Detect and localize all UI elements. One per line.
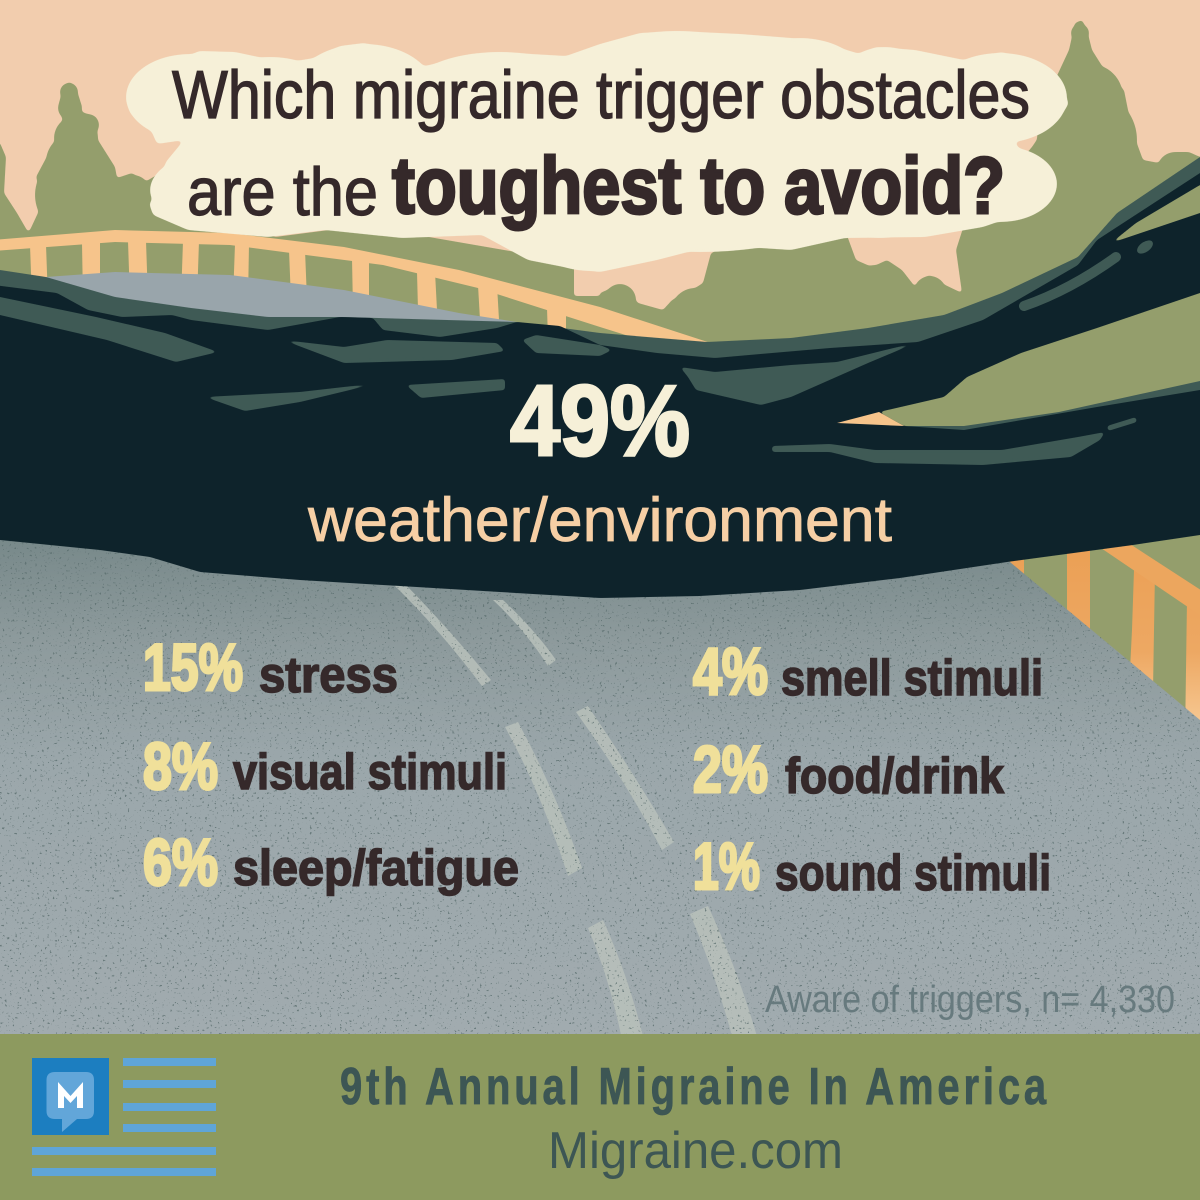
stat: sleep/fatigue: [143, 825, 519, 899]
band main body: [0, 150, 1200, 598]
bridge rail, far side: [0, 230, 720, 352]
stat: visual stimuli: visual stimuli: [233, 744, 507, 800]
stat: stress: [143, 630, 398, 704]
stat: stress: stress: [259, 647, 398, 703]
stat: visual stimuli: 8%: [143, 729, 218, 803]
bridge rail and posts, near side: [1007, 530, 1200, 740]
49 percent: 49%: [510, 365, 690, 477]
stat: sound stimuli: 1%: [693, 829, 760, 903]
stat: sleep/fatigue: 6%: [143, 825, 218, 899]
road grain: [0, 540, 1200, 1034]
stat: sleep/fatigue: sleep/fatigue: [233, 840, 519, 896]
right stat list: [693, 634, 1051, 903]
title cloud: [126, 31, 1069, 272]
left stat list: [143, 630, 519, 899]
stat: food/drink: food/drink: [785, 748, 1004, 804]
headline statistic: [307, 365, 892, 555]
orange bridge glimpse: [837, 412, 904, 426]
title line 1: Which migraine trigger obstacles: [172, 57, 1030, 133]
green land wedges: [879, 170, 1200, 427]
stat: smell stimuli: [693, 634, 1043, 708]
icon: Migraine.com logo: [32, 1058, 109, 1135]
dark band: river of obstacles: [0, 135, 1200, 598]
light shore edge: [904, 381, 1200, 430]
weather label: weather/environment: [307, 486, 892, 555]
stat: smell stimuli: smell stimuli: [781, 650, 1043, 706]
title line 2: toughest to avoid?: [392, 141, 1005, 230]
stat: visual stimuli: [143, 729, 507, 803]
footer site name: Migraine.com: [548, 1122, 843, 1180]
trees and hills: [0, 20, 1200, 420]
band streaks: [0, 290, 1137, 465]
title line 2: [187, 141, 1005, 230]
stat: sound stimuli: sound stimuli: [775, 845, 1051, 901]
band highlight layer: [0, 135, 1200, 420]
footer band: [0, 1034, 1200, 1200]
logo lines: [32, 1058, 216, 1176]
stat: food/drink: 2%: [693, 732, 768, 806]
title line 2: are the: [187, 154, 378, 230]
stat: smell stimuli: 4%: [693, 634, 768, 708]
stat: food/drink: [693, 732, 1004, 806]
far road hump: [30, 272, 540, 340]
stat: sound stimuli: [693, 829, 1051, 903]
road surface: [0, 520, 1200, 1034]
road lane dashes: [394, 585, 758, 1040]
title: [172, 57, 1030, 230]
stat: stress: 15%: [143, 630, 243, 704]
